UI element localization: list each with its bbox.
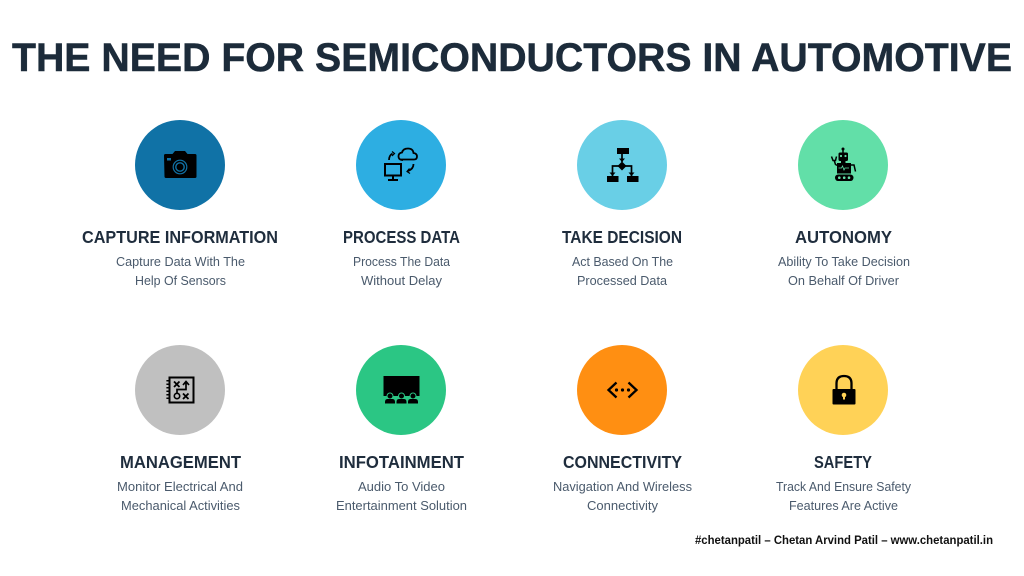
icon: strategy notebook (168, 378, 194, 402)
panel: process data (343, 120, 460, 288)
panel: capture information (82, 120, 278, 288)
description: connectivity: Connectivity (587, 498, 658, 513)
heading: safety: SAFETY (814, 452, 872, 472)
description: safety (776, 479, 911, 513)
heading: capture information: CAPTURE INFORMATION (82, 227, 278, 247)
icon: flowchart (607, 148, 638, 182)
panel: infotainment (336, 345, 467, 513)
description: process data: Process The Data (353, 254, 451, 269)
description: autonomy (778, 254, 910, 288)
description: take decision: Act Based On The (572, 254, 673, 269)
panel: management (117, 345, 243, 513)
description: infotainment (336, 479, 467, 513)
description: management: Monitor Electrical And (117, 479, 243, 494)
description: take decision: Processed Data (577, 273, 668, 288)
icon: connection chevrons (608, 382, 636, 398)
description: safety: Track And Ensure Safety (776, 479, 911, 494)
description: management (117, 479, 243, 513)
description: connectivity (553, 479, 692, 513)
heading: infotainment: INFOTAINMENT (339, 452, 464, 472)
icon: robot (832, 148, 856, 181)
icon: cinema screen with audience (384, 376, 420, 404)
heading: management: MANAGEMENT (120, 452, 241, 472)
title: THE NEED FOR SEMICONDUCTORS IN AUTOMOTIVE (12, 36, 1012, 80)
heading: autonomy: AUTONOMY (795, 227, 892, 247)
description: process data: Without Delay (361, 273, 442, 288)
description: autonomy: Ability To Take Decision (778, 254, 910, 269)
icon: camera (164, 151, 196, 178)
description: capture information: Help Of Sensors (135, 273, 226, 288)
footer credit: #chetanpatil – Chetan Arvind Patil – www.chetanpatil.in (695, 535, 993, 547)
description: process data (353, 254, 451, 288)
heading: connectivity: CONNECTIVITY (563, 452, 682, 472)
panel: connectivity (553, 345, 692, 513)
panel: autonomy (778, 120, 910, 288)
description: infotainment: Entertainment Solution (336, 498, 467, 513)
description: management: Mechanical Activities (121, 498, 240, 513)
heading: take decision: TAKE DECISION (562, 227, 682, 247)
description: safety: Features Are Active (789, 498, 898, 513)
description: connectivity: Navigation And Wireless (553, 479, 692, 494)
description: capture information (116, 254, 245, 288)
icon: padlock (832, 376, 856, 404)
description: autonomy: On Behalf Of Driver (788, 273, 900, 288)
description: capture information: Capture Data With The (116, 254, 245, 269)
description: infotainment: Audio To Video (358, 479, 445, 494)
heading: process data: PROCESS DATA (343, 227, 460, 247)
panel: safety (776, 345, 911, 513)
description: take decision (572, 254, 673, 288)
panel: take decision (562, 120, 682, 288)
icon: monitor and cloud (385, 148, 417, 180)
